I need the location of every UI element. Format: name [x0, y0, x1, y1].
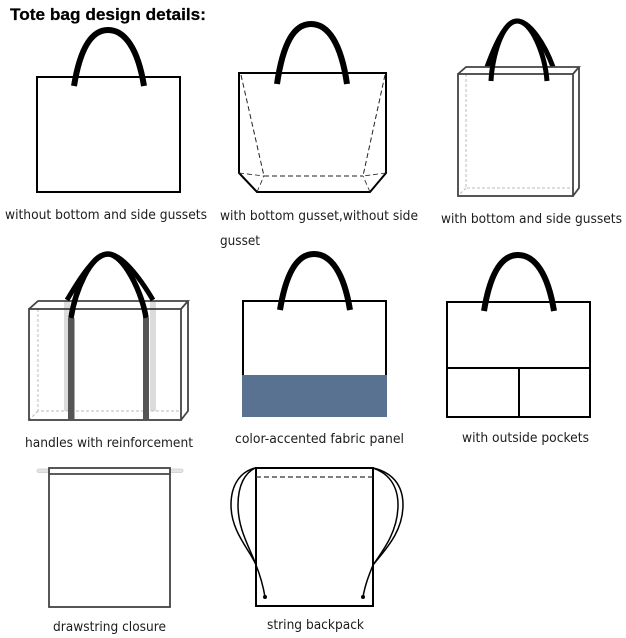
bag: without bottom and side gussets [5, 30, 207, 223]
bag: with outside pockets [447, 255, 590, 446]
bag: with bottom gusset [220, 24, 418, 249]
caption: drawstring: drawstring closure [53, 620, 166, 635]
title: Tote bag design details: [10, 5, 206, 24]
caption: panel: color-accented fabric panel [235, 432, 404, 447]
bag: string backpack [231, 468, 403, 633]
caption: backpack: string backpack [267, 618, 364, 633]
caption: without gussets: without bottom and side gussets [5, 208, 207, 223]
bag: color-accented fabric panel [235, 254, 404, 447]
caption: with bottom gusset: with bottom gusset,without side [220, 209, 418, 224]
caption: handles: handles with reinforcement [25, 436, 193, 451]
bag: with bottom and side gussets [441, 21, 622, 227]
bag: drawstring closure [37, 468, 183, 635]
caption: pockets: with outside pockets [462, 431, 589, 446]
accent panel [242, 375, 387, 417]
caption: second line: gusset [220, 234, 260, 249]
bag: handles with reinforcement [25, 254, 193, 451]
